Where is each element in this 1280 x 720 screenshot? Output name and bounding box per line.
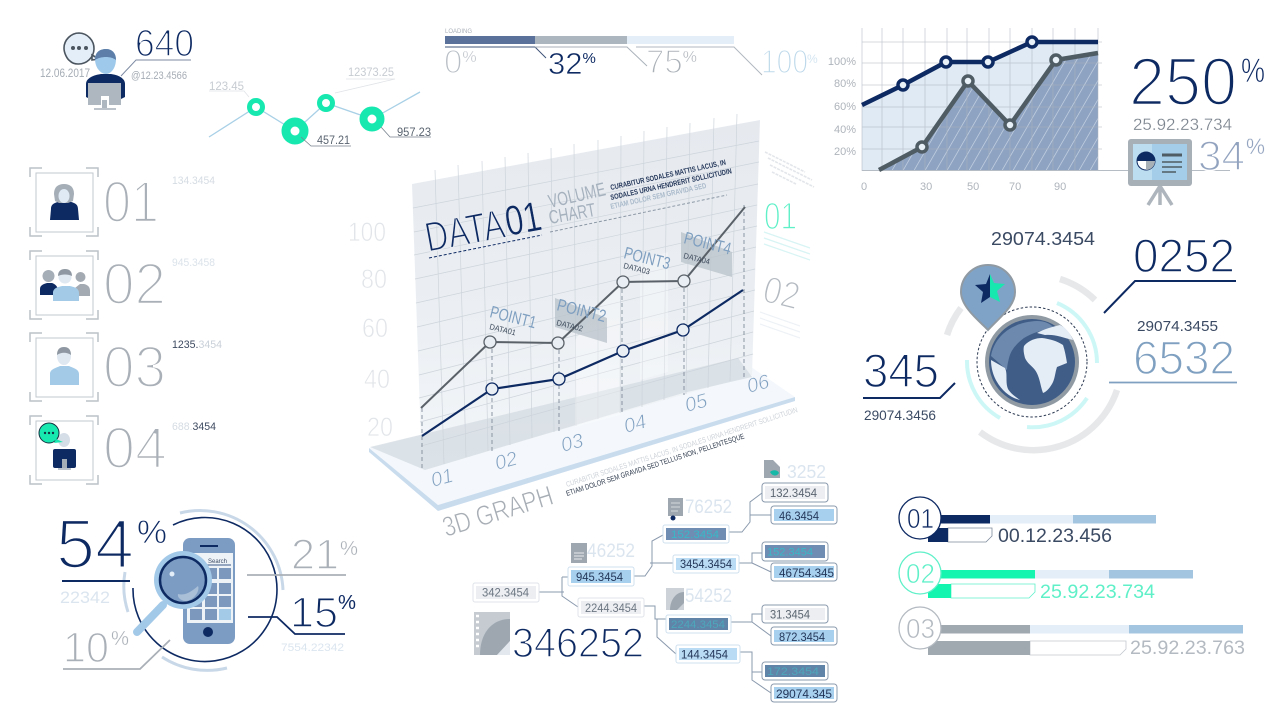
side label 02 <box>759 269 804 338</box>
node 132 <box>762 483 828 502</box>
label 29074.3454: 29074.3454 <box>991 229 1095 249</box>
floor axis labels: 05 <box>683 390 711 417</box>
value: 688.3454 <box>172 421 216 433</box>
navy line <box>862 42 1098 105</box>
value 0252: 0252 <box>1133 229 1235 282</box>
node 29074: 29074.345 <box>776 687 832 701</box>
loading caption: LOADING <box>445 29 472 35</box>
panel: mobile search <box>56 505 358 672</box>
icon: globe <box>985 315 1079 409</box>
value 76252: 76252 <box>685 497 732 518</box>
value 346252: 346252 <box>512 619 644 666</box>
point labels <box>488 228 733 332</box>
pale arcs <box>124 511 283 670</box>
node 31 <box>762 605 828 623</box>
dashed rule under heading <box>429 235 542 258</box>
list item 03 <box>30 333 222 401</box>
glass wall <box>412 120 760 470</box>
node 132: 132.3454 <box>770 486 817 500</box>
grey data line <box>421 207 745 408</box>
value 54252: 54252 <box>685 586 732 607</box>
value 21%: 21 <box>291 531 339 579</box>
floor axis labels: 04 <box>622 411 649 438</box>
hatched grey area <box>879 53 1098 170</box>
value: 00.12.23.456 <box>998 526 1112 547</box>
icon: star pin <box>961 265 1015 330</box>
wall grid <box>413 114 759 464</box>
chart x labels: 0 <box>861 181 867 193</box>
side label 01 <box>764 196 810 260</box>
value 34%: 34 <box>1198 132 1245 179</box>
wall description: SODALES URNA HENDRERIT SOLLICITUDIN <box>609 166 732 202</box>
floor axis labels: 02 <box>493 448 520 475</box>
grey line <box>879 53 1098 170</box>
point labels: POINT2 <box>555 295 608 326</box>
value: 945.3458 <box>172 257 215 269</box>
handle text: @12.23.4566 <box>131 70 187 82</box>
percent sign: % <box>1241 52 1265 90</box>
icon: phone: Search <box>208 559 227 565</box>
title: 3D GRAPH: 3D GRAPH <box>439 480 557 543</box>
panel: 3D graph <box>348 114 814 543</box>
value 10%: 10 <box>63 624 109 672</box>
icon: person with mint bubble <box>39 423 76 470</box>
leader 0252 <box>1104 281 1236 313</box>
number 01: 01 <box>103 170 159 235</box>
rule 54 <box>62 580 130 582</box>
point labels: POINT4 <box>682 228 733 258</box>
percent sign: % <box>1246 134 1265 159</box>
floor plate <box>369 358 795 511</box>
wall description: ETIAM DOLOR SEM GRAVIDA SED <box>609 181 708 211</box>
chart x labels: 90 <box>1054 181 1066 193</box>
icon: man <box>50 347 79 385</box>
node 1 <box>250 100 262 114</box>
bar 01 <box>899 497 1156 547</box>
percent sign: % <box>340 538 358 560</box>
navy data line <box>422 290 743 436</box>
list item 01 <box>30 168 215 236</box>
floor axis labels: 06 <box>745 371 773 398</box>
node 144 <box>676 645 740 663</box>
chart y labels <box>828 56 856 158</box>
icon: person at monitor <box>86 49 125 110</box>
node 2244: 2244.3454 <box>585 601 637 615</box>
value: 25.92.23.763 <box>1130 638 1245 659</box>
line chart: mint nodes <box>209 65 431 147</box>
side small caption <box>765 152 814 187</box>
icon: woman <box>50 184 79 220</box>
node 3 <box>320 96 332 110</box>
subheading: volume chart: CHART <box>547 200 597 229</box>
data labels: DATA02 <box>556 318 584 334</box>
tree connectors <box>539 493 771 693</box>
label 123.45: 123.45 <box>209 79 244 93</box>
axis line <box>862 170 1230 172</box>
label 29074.3455: 29074.3455 <box>1137 318 1218 335</box>
chart x labels <box>861 181 1066 193</box>
leader 15 <box>248 617 345 634</box>
bar 03 <box>899 607 1245 659</box>
leader 10 <box>63 640 170 669</box>
value 32%: 32 <box>548 46 582 81</box>
node 342 <box>473 583 539 602</box>
label 29074.3456: 29074.3456 <box>864 407 936 423</box>
wall description: CURABITUR SODALES MATTIS LACUS, IN <box>609 158 727 192</box>
percent sign for 100: % <box>807 52 818 66</box>
node 2244 <box>578 598 644 617</box>
value 54%: 54 <box>56 505 134 583</box>
node dark bottom: 172.3454 <box>767 666 819 678</box>
icon: film corner large <box>474 612 510 655</box>
side label 01: 01 <box>764 196 797 238</box>
label tag 2 <box>555 298 607 343</box>
icon: speech bubble <box>64 33 99 64</box>
panel: loading bar <box>444 29 818 81</box>
icon: presentation board <box>1128 139 1192 205</box>
number 04: 04 <box>103 416 167 481</box>
node dark bottom <box>762 662 828 680</box>
node 29074 <box>771 684 837 702</box>
point labels: POINT3 <box>622 243 672 273</box>
value 100%: 100 <box>761 43 808 80</box>
label 22342: 22342 <box>60 588 110 607</box>
light area <box>862 42 1098 170</box>
data points <box>484 275 690 395</box>
number 03: 03 <box>103 335 166 400</box>
node 31: 31.3454 <box>770 608 810 622</box>
node 3454 <box>673 555 739 573</box>
y axis labels: 60 <box>362 313 388 343</box>
trend line <box>209 92 420 137</box>
icon: magnifier <box>137 551 212 632</box>
value 250%: 250 <box>1129 44 1237 120</box>
value 15%: 15 <box>290 589 338 637</box>
node dark upper: 152.3454 <box>671 529 719 541</box>
icon: document 46252 <box>571 543 587 563</box>
label 7554.22342: 7554.22342 <box>281 642 344 654</box>
floor axis labels: 01 <box>429 465 456 492</box>
y axis labels: 100 <box>348 217 386 247</box>
list item 02 <box>30 251 215 319</box>
rule 6532 <box>1109 382 1237 384</box>
rule 21 <box>247 574 346 576</box>
segmented bar <box>445 36 734 44</box>
chart y labels: 40% <box>834 124 856 136</box>
value text: 25.92.23.734 <box>1133 115 1232 134</box>
value 6532: 6532 <box>1133 331 1235 384</box>
floor caption: CURABITUR SODALES MATTIS LACUS, IN SODALES URNA HENDRERIT SOLLICITUDIN <box>565 405 799 489</box>
percent sign: % <box>338 592 356 614</box>
label leaders <box>209 79 395 97</box>
node 46: 46.3454 <box>779 509 819 523</box>
node 342: 342.3454 <box>482 586 529 600</box>
heading: DATA: DATA <box>421 200 508 261</box>
white light patches <box>575 252 668 427</box>
number 02: 02 <box>103 252 166 317</box>
node dark top right <box>762 542 828 561</box>
icon: phone <box>183 538 235 644</box>
chart x labels: 50 <box>967 181 979 193</box>
label 957.23: 957.23 <box>397 125 431 139</box>
data labels: DATA04 <box>683 251 711 267</box>
data labels: DATA01 <box>489 322 517 338</box>
leader 345 <box>863 383 955 398</box>
node 4 <box>364 110 380 128</box>
node 46 <box>771 506 837 524</box>
label 01: 01 <box>907 503 934 534</box>
navy ring <box>133 518 277 662</box>
value 75%: 75 <box>646 43 683 80</box>
chart x labels: 30 <box>920 181 932 193</box>
node 2 <box>286 122 304 140</box>
node dark middle: 2244.3454 <box>671 619 725 631</box>
chart x labels: 70 <box>1009 181 1021 193</box>
leaders <box>445 47 546 58</box>
label 02: 02 <box>906 558 935 589</box>
node 872: 872.3454 <box>779 630 825 644</box>
value 3252: 3252 <box>787 462 826 482</box>
value: 134.3454 <box>172 175 215 187</box>
dashed ring <box>977 307 1087 417</box>
leader line <box>121 60 191 76</box>
panel: area chart <box>828 28 1265 205</box>
percent sign: % <box>137 514 167 550</box>
node 46754: 46754.345 <box>779 566 834 580</box>
node dark top right: 152.3454 <box>767 546 813 558</box>
y axis labels: 20 <box>367 412 393 442</box>
bar 02 <box>899 552 1193 603</box>
node 144: 144.3454 <box>681 648 728 662</box>
floor axis labels: 03 <box>559 430 586 457</box>
y axis labels: 80 <box>361 264 387 294</box>
value 75%: % <box>683 49 697 66</box>
floor axis labels <box>429 371 773 492</box>
subheading: volume chart: VOLUME <box>546 179 608 213</box>
label 12373.25: 12373.25 <box>348 65 394 79</box>
point labels: POINT1 <box>488 302 538 332</box>
icon: file 3252 <box>764 460 780 478</box>
heading: 01: 01 <box>501 192 545 245</box>
date text: 12.06.2017 <box>40 68 90 80</box>
chart y labels: 100% <box>828 56 856 68</box>
label tag 4 <box>681 232 732 277</box>
y axis labels: 40 <box>364 364 390 394</box>
icon: certificate 76252 <box>668 498 683 520</box>
icon: team <box>40 269 90 301</box>
data labels: DATA03 <box>623 261 651 277</box>
floor shadow <box>370 358 752 470</box>
chart nodes <box>898 37 1061 152</box>
list item 04 <box>30 416 216 484</box>
value 0%: 0 <box>444 43 462 80</box>
dashed rule upper <box>550 195 727 232</box>
node 872 <box>771 627 837 645</box>
node 945 <box>568 567 634 586</box>
grid <box>862 28 1102 171</box>
wall description <box>609 158 732 211</box>
percent sign: % <box>111 628 129 650</box>
floor caption: ETIAM DOLOR SEM GRAVIDA SED TELLUS NON, PELLENTESQUE <box>565 432 745 498</box>
value: 25.92.23.734 <box>1040 582 1155 603</box>
value 0%: % <box>462 49 477 66</box>
node 945: 945.3454 <box>576 570 623 584</box>
chart y labels: 20% <box>834 146 856 158</box>
chart y labels: 60% <box>834 101 856 113</box>
panel: globe stats <box>863 229 1237 450</box>
panel: user counter <box>40 23 194 110</box>
node dark middle <box>666 615 731 633</box>
y axis labels <box>348 217 393 442</box>
node 46754 <box>771 563 837 581</box>
grey arcs <box>947 279 1117 450</box>
value 32%: % <box>582 50 596 67</box>
side label 02: 02 <box>759 269 804 318</box>
node dark upper <box>663 525 729 543</box>
node 3454: 3454.3454 <box>680 557 732 571</box>
icon: film corner small <box>666 588 684 610</box>
chart y labels: 80% <box>834 78 856 90</box>
data labels <box>489 251 711 338</box>
cyan arcs <box>967 303 1097 427</box>
value 46252: 46252 <box>587 541 635 562</box>
panel: person list <box>30 168 222 484</box>
value: 1235.3454 <box>172 339 222 351</box>
subheading: volume chart <box>546 179 608 229</box>
label 457.21: 457.21 <box>317 133 350 147</box>
label 03: 03 <box>906 613 935 644</box>
value: 640: 640 <box>135 23 194 65</box>
drop lines <box>422 205 744 470</box>
panel: data tree <box>473 460 837 702</box>
value 345: 345 <box>863 344 939 397</box>
panel: progress bars <box>899 497 1245 659</box>
